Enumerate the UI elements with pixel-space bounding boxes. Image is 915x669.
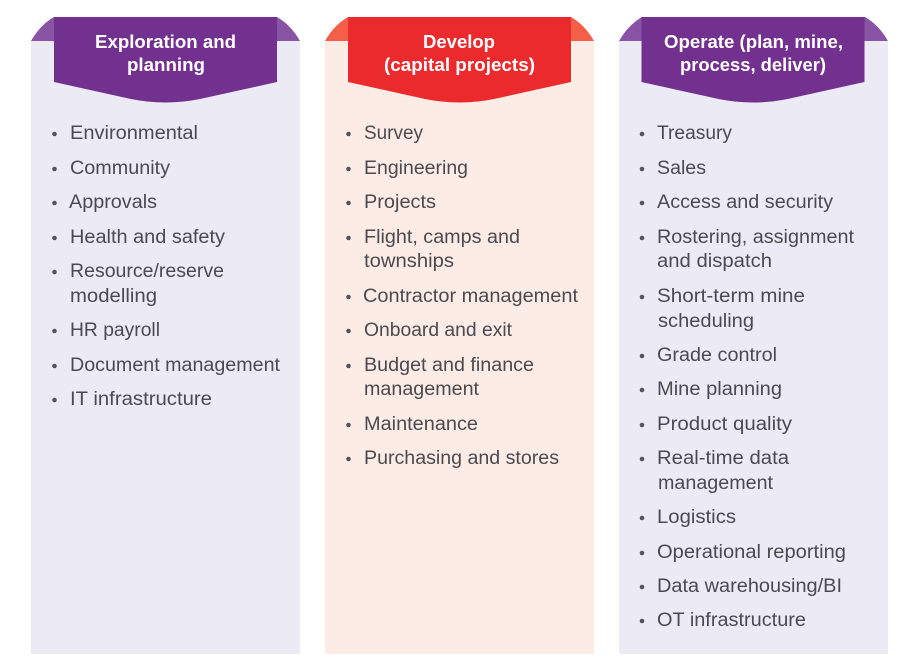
panel background bbox=[31, 41, 300, 654]
heading: (capital projects) bbox=[384, 55, 535, 75]
item: Operational reporting: Operational reporting bbox=[657, 542, 846, 563]
item: Data warehousing/BI: Data warehousing/BI bbox=[657, 576, 842, 597]
heading bbox=[384, 32, 535, 75]
item: Survey: Survey bbox=[364, 123, 423, 144]
heading: planning bbox=[127, 55, 205, 75]
item: Purchasing and stores: Purchasing and stores bbox=[364, 448, 559, 469]
heading: process, deliver) bbox=[680, 55, 826, 75]
heading bbox=[664, 32, 843, 75]
list bbox=[52, 123, 281, 410]
item: Logistics: Logistics bbox=[657, 507, 736, 528]
banner bbox=[642, 17, 864, 102]
item: Budget and finance management bbox=[346, 355, 534, 400]
item: Maintenance: Maintenance bbox=[364, 414, 478, 435]
item: Grade control: Grade control bbox=[657, 345, 777, 366]
banner corners bbox=[325, 17, 594, 41]
banner corners bbox=[619, 17, 888, 41]
item: Approvals: Approvals bbox=[69, 192, 157, 213]
banner bbox=[54, 17, 277, 102]
heading bbox=[95, 32, 236, 75]
panel background bbox=[325, 41, 594, 654]
item: Flight, camps and townships: Flight, camps and bbox=[364, 227, 520, 248]
item: Mine planning: Mine planning bbox=[657, 379, 782, 400]
item: Resource/reserve modelling: Resource/reserve bbox=[70, 261, 224, 282]
item: Rostering, assignment and dispatch: Rostering, assignment bbox=[657, 227, 855, 248]
item: Community: Community bbox=[70, 158, 171, 179]
item: Flight, camps and townships bbox=[346, 227, 520, 272]
item: Contractor management: Contractor management bbox=[363, 286, 579, 307]
heading: Exploration and bbox=[95, 32, 236, 52]
item: Budget and finance management: Budget and finance bbox=[364, 355, 534, 376]
item: Health and safety: Health and safety bbox=[70, 227, 226, 248]
item: Treasury: Treasury bbox=[657, 123, 732, 144]
item: Projects: Projects bbox=[364, 192, 436, 213]
item: Document management: Document management bbox=[70, 355, 281, 376]
item: Onboard and exit: Onboard and exit bbox=[364, 320, 513, 341]
item: Engineering: Engineering bbox=[364, 158, 468, 179]
banner corners bbox=[31, 17, 300, 41]
item: OT infrastructure: OT infrastructure bbox=[657, 610, 806, 631]
item: HR payroll: HR payroll bbox=[70, 320, 160, 341]
item: Resource/reserve modelling: modelling bbox=[70, 286, 157, 307]
item: Access and security: Access and security bbox=[657, 192, 834, 213]
item: Real-time data management bbox=[640, 448, 789, 494]
panel: develop bbox=[325, 17, 594, 654]
item: Environmental: Environmental bbox=[70, 123, 198, 144]
item: Real-time data management: Real-time data bbox=[657, 448, 789, 469]
heading: Operate (plan, mine, bbox=[664, 32, 843, 52]
item: Short-term mine scheduling: Short-term mine bbox=[657, 286, 805, 307]
item: Resource/reserve modelling bbox=[52, 261, 224, 307]
item: Sales: Sales bbox=[657, 158, 706, 179]
item: Short-term mine scheduling: scheduling bbox=[658, 311, 754, 332]
item: Rostering, assignment and dispatch: and dispatch bbox=[657, 251, 772, 272]
item: Budget and finance management: management bbox=[364, 379, 480, 400]
panel background bbox=[619, 41, 888, 654]
item: Short-term mine scheduling bbox=[640, 286, 805, 332]
item: Product quality: Product quality bbox=[657, 414, 793, 435]
panel: operate bbox=[619, 17, 888, 654]
panel: exploration and planning bbox=[31, 17, 300, 654]
banner bbox=[348, 17, 571, 102]
list bbox=[346, 123, 579, 469]
item: Real-time data management: management bbox=[658, 473, 774, 494]
item: Flight, camps and townships: townships bbox=[364, 251, 454, 272]
item: IT infrastructure: IT infrastructure bbox=[70, 389, 212, 410]
item: Rostering, assignment and dispatch bbox=[640, 227, 855, 272]
heading: Develop bbox=[423, 32, 495, 52]
list bbox=[640, 123, 855, 631]
